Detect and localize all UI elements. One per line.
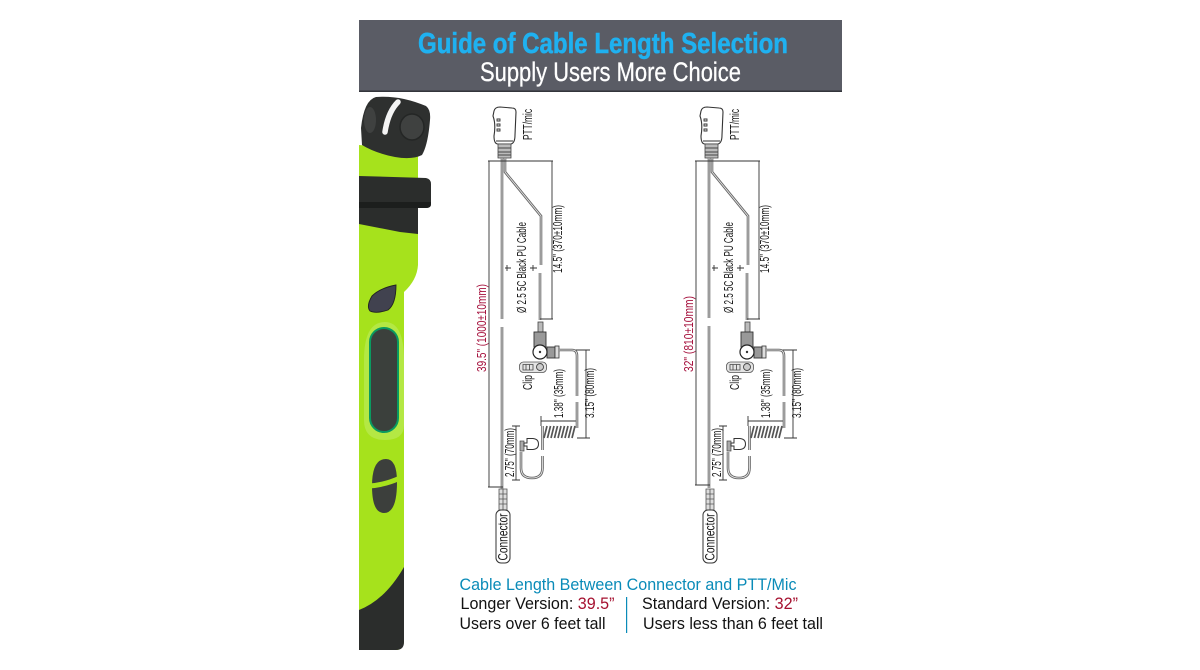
cable (502, 158, 541, 489)
clip (726, 362, 754, 372)
label: PTT/mic: PTT/mic (521, 109, 535, 140)
oval divider (369, 478, 400, 486)
label: 14.5 inch: 14.5" (370±10mm) (551, 205, 565, 273)
lower oval button (372, 459, 397, 513)
PTT button (370, 328, 398, 432)
label: cable type: Ø 2.5 5C Black PU Cable (515, 222, 529, 313)
label: 3.15 inch: 3.15" (80mm) (583, 368, 597, 418)
caption heading: Cable Length Between Connector and PTT/Mic (460, 576, 796, 594)
knob (361, 97, 430, 158)
PTT surround (364, 322, 404, 440)
collar (359, 176, 431, 234)
label: 2.75 inch: 2.75" (70mm) (503, 428, 517, 477)
earpiece joint (533, 322, 559, 359)
side button (368, 285, 396, 312)
subtitle: Supply Users More Choice (480, 57, 741, 87)
clip (520, 362, 546, 372)
ear tip (727, 438, 746, 451)
label: 14.5 inch: 14.5" (370±10mm) (758, 205, 772, 273)
label: 1.38 inch: 1.38" (35mm) (552, 369, 566, 418)
connector: Connector (494, 513, 510, 560)
label: total length: 39.5" (1000±10mm) (475, 284, 489, 372)
comparison caption (460, 576, 823, 633)
earpiece joint (740, 322, 766, 359)
acoustic tube (521, 350, 577, 478)
label: clip: Clip (728, 375, 742, 390)
label: clip: Clip (521, 375, 535, 390)
label: cable type: Ø 2.5 5C Black PU Cable (722, 222, 736, 313)
longer version audience: Users over 6 feet tall (460, 615, 606, 633)
knob marker (385, 102, 398, 132)
radio product photo (359, 97, 431, 650)
ear tip (520, 438, 538, 451)
label: total length: 32" (810±10mm) (682, 296, 696, 372)
dimension lines (488, 161, 590, 487)
label: 1.38 inch: 1.38" (35mm) (759, 369, 773, 418)
connector: Connector (702, 513, 718, 560)
title: Guide of Cable Length Selection (418, 28, 788, 60)
acoustic tube (728, 350, 784, 478)
diagram: longer version (475, 107, 597, 563)
label: PTT/mic: PTT/mic (728, 109, 742, 140)
cable (709, 158, 748, 488)
longer version value: Longer Version: 39.5” (460, 595, 614, 613)
divider (626, 597, 627, 633)
PTT mic (493, 107, 516, 158)
standard version value: Standard Version: 32” (642, 595, 798, 613)
PTT mic (700, 107, 723, 158)
standard version audience: Users less than 6 feet tall (643, 615, 823, 633)
label: 3.15 inch: 3.15" (80mm) (790, 368, 804, 418)
radio body (359, 145, 418, 650)
dimension lines (695, 161, 797, 485)
header banner (359, 20, 842, 92)
diagram: standard version (682, 107, 804, 563)
label: 2.75 inch: 2.75" (70mm) (710, 428, 724, 477)
battery base (359, 567, 404, 650)
